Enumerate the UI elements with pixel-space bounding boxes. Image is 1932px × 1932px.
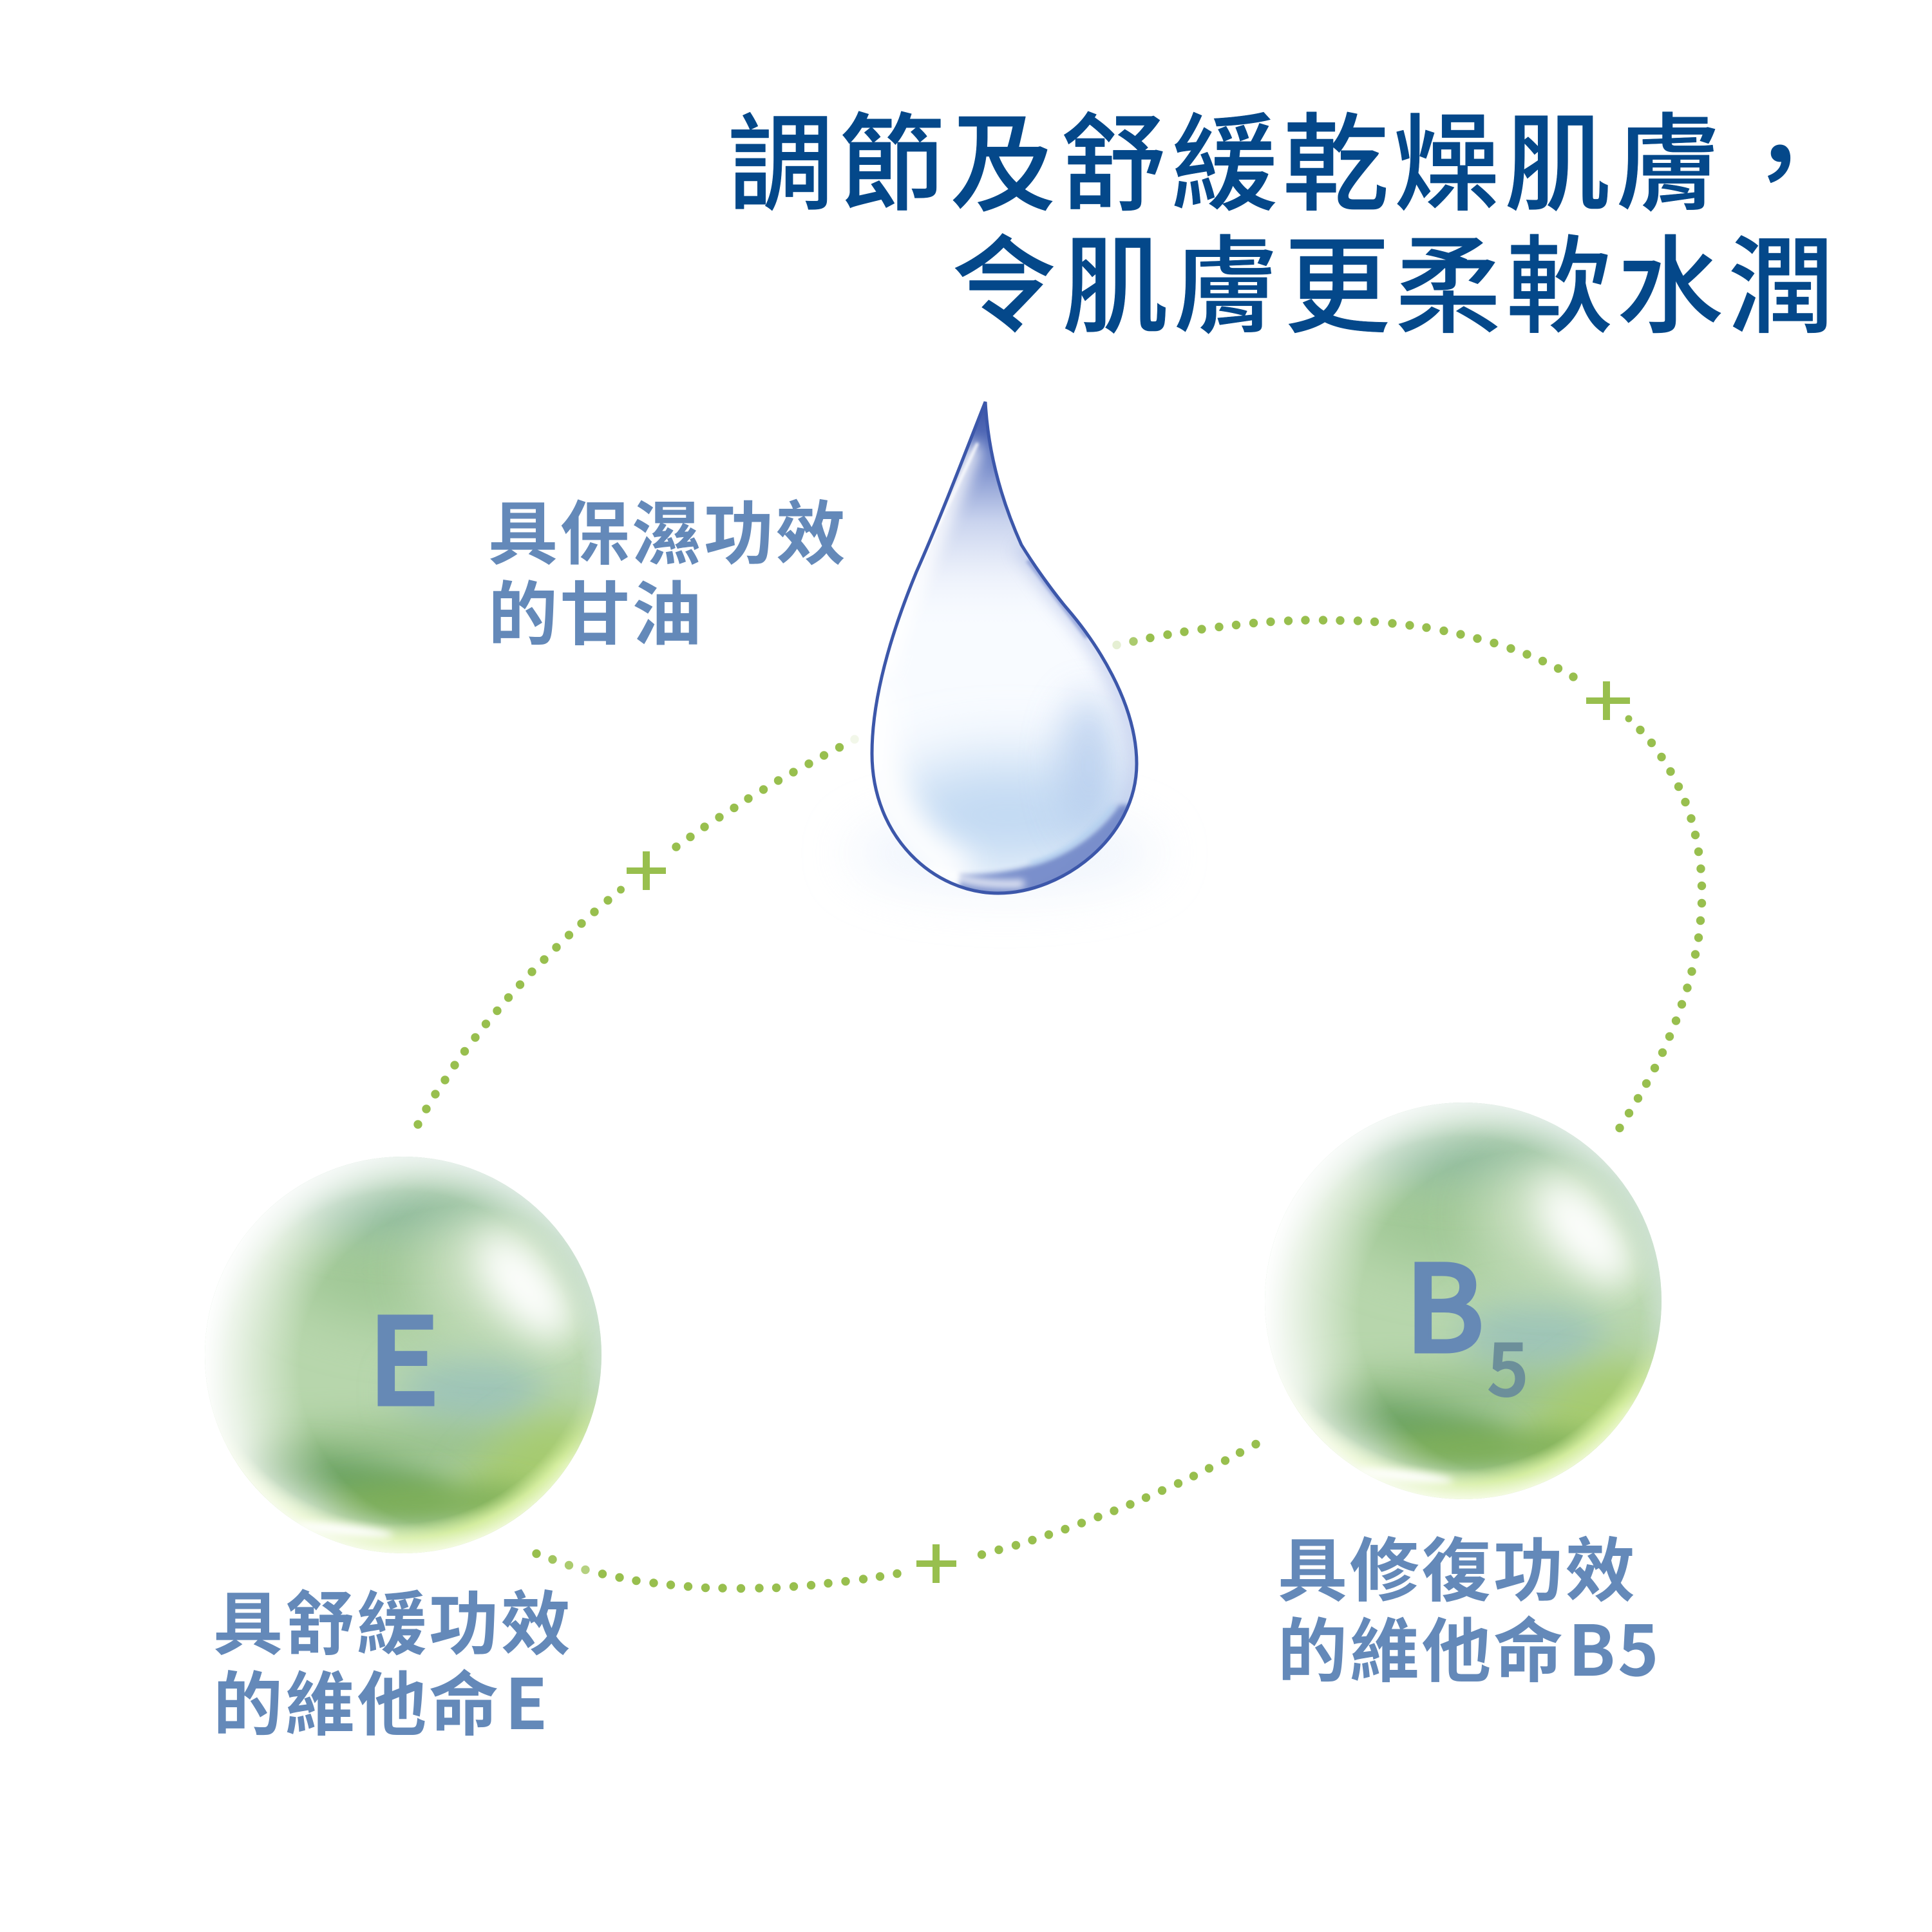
sphere: vitamin B5 <box>1257 1095 1674 1507</box>
title: 令肌膚更柔軟水潤 <box>951 201 1839 355</box>
sphere: vitamin E <box>197 1149 614 1561</box>
dotted arc: vitamin E to water drop <box>413 735 859 1129</box>
label: vitamin E: 的維他命E <box>213 1649 550 1750</box>
title <box>728 79 1839 355</box>
title: 調節及舒緩乾燥肌膚， <box>728 79 1837 232</box>
label: glycerin <box>488 478 848 659</box>
letter B5: 5 <box>1488 1313 1528 1416</box>
dotted arc: vitamin B5 to vitamin E <box>532 1440 1260 1593</box>
label: glycerin: 具保濕功效 <box>488 478 848 579</box>
label: vitamin B5 <box>1278 1515 1661 1696</box>
letter B5 <box>1405 1213 1528 1416</box>
label: vitamin E <box>213 1569 573 1750</box>
plus sign: glycerin and B5 <box>1586 681 1630 720</box>
plus sign: B5 and E <box>916 1544 956 1583</box>
dotted arc: water drop to vitamin B5 <box>1112 616 1706 1132</box>
letter B5: B <box>1405 1213 1484 1387</box>
icon: water drop <box>871 401 1139 895</box>
label: vitamin B5: 的維他命B5 <box>1278 1596 1661 1696</box>
plus sign: E and glycerin <box>627 851 666 890</box>
label: glycerin: 的甘油 <box>488 559 704 659</box>
label: vitamin B5: 具修復功效 <box>1278 1515 1638 1616</box>
letter E: E <box>368 1265 440 1439</box>
label: vitamin E: 具舒緩功效 <box>213 1569 573 1669</box>
